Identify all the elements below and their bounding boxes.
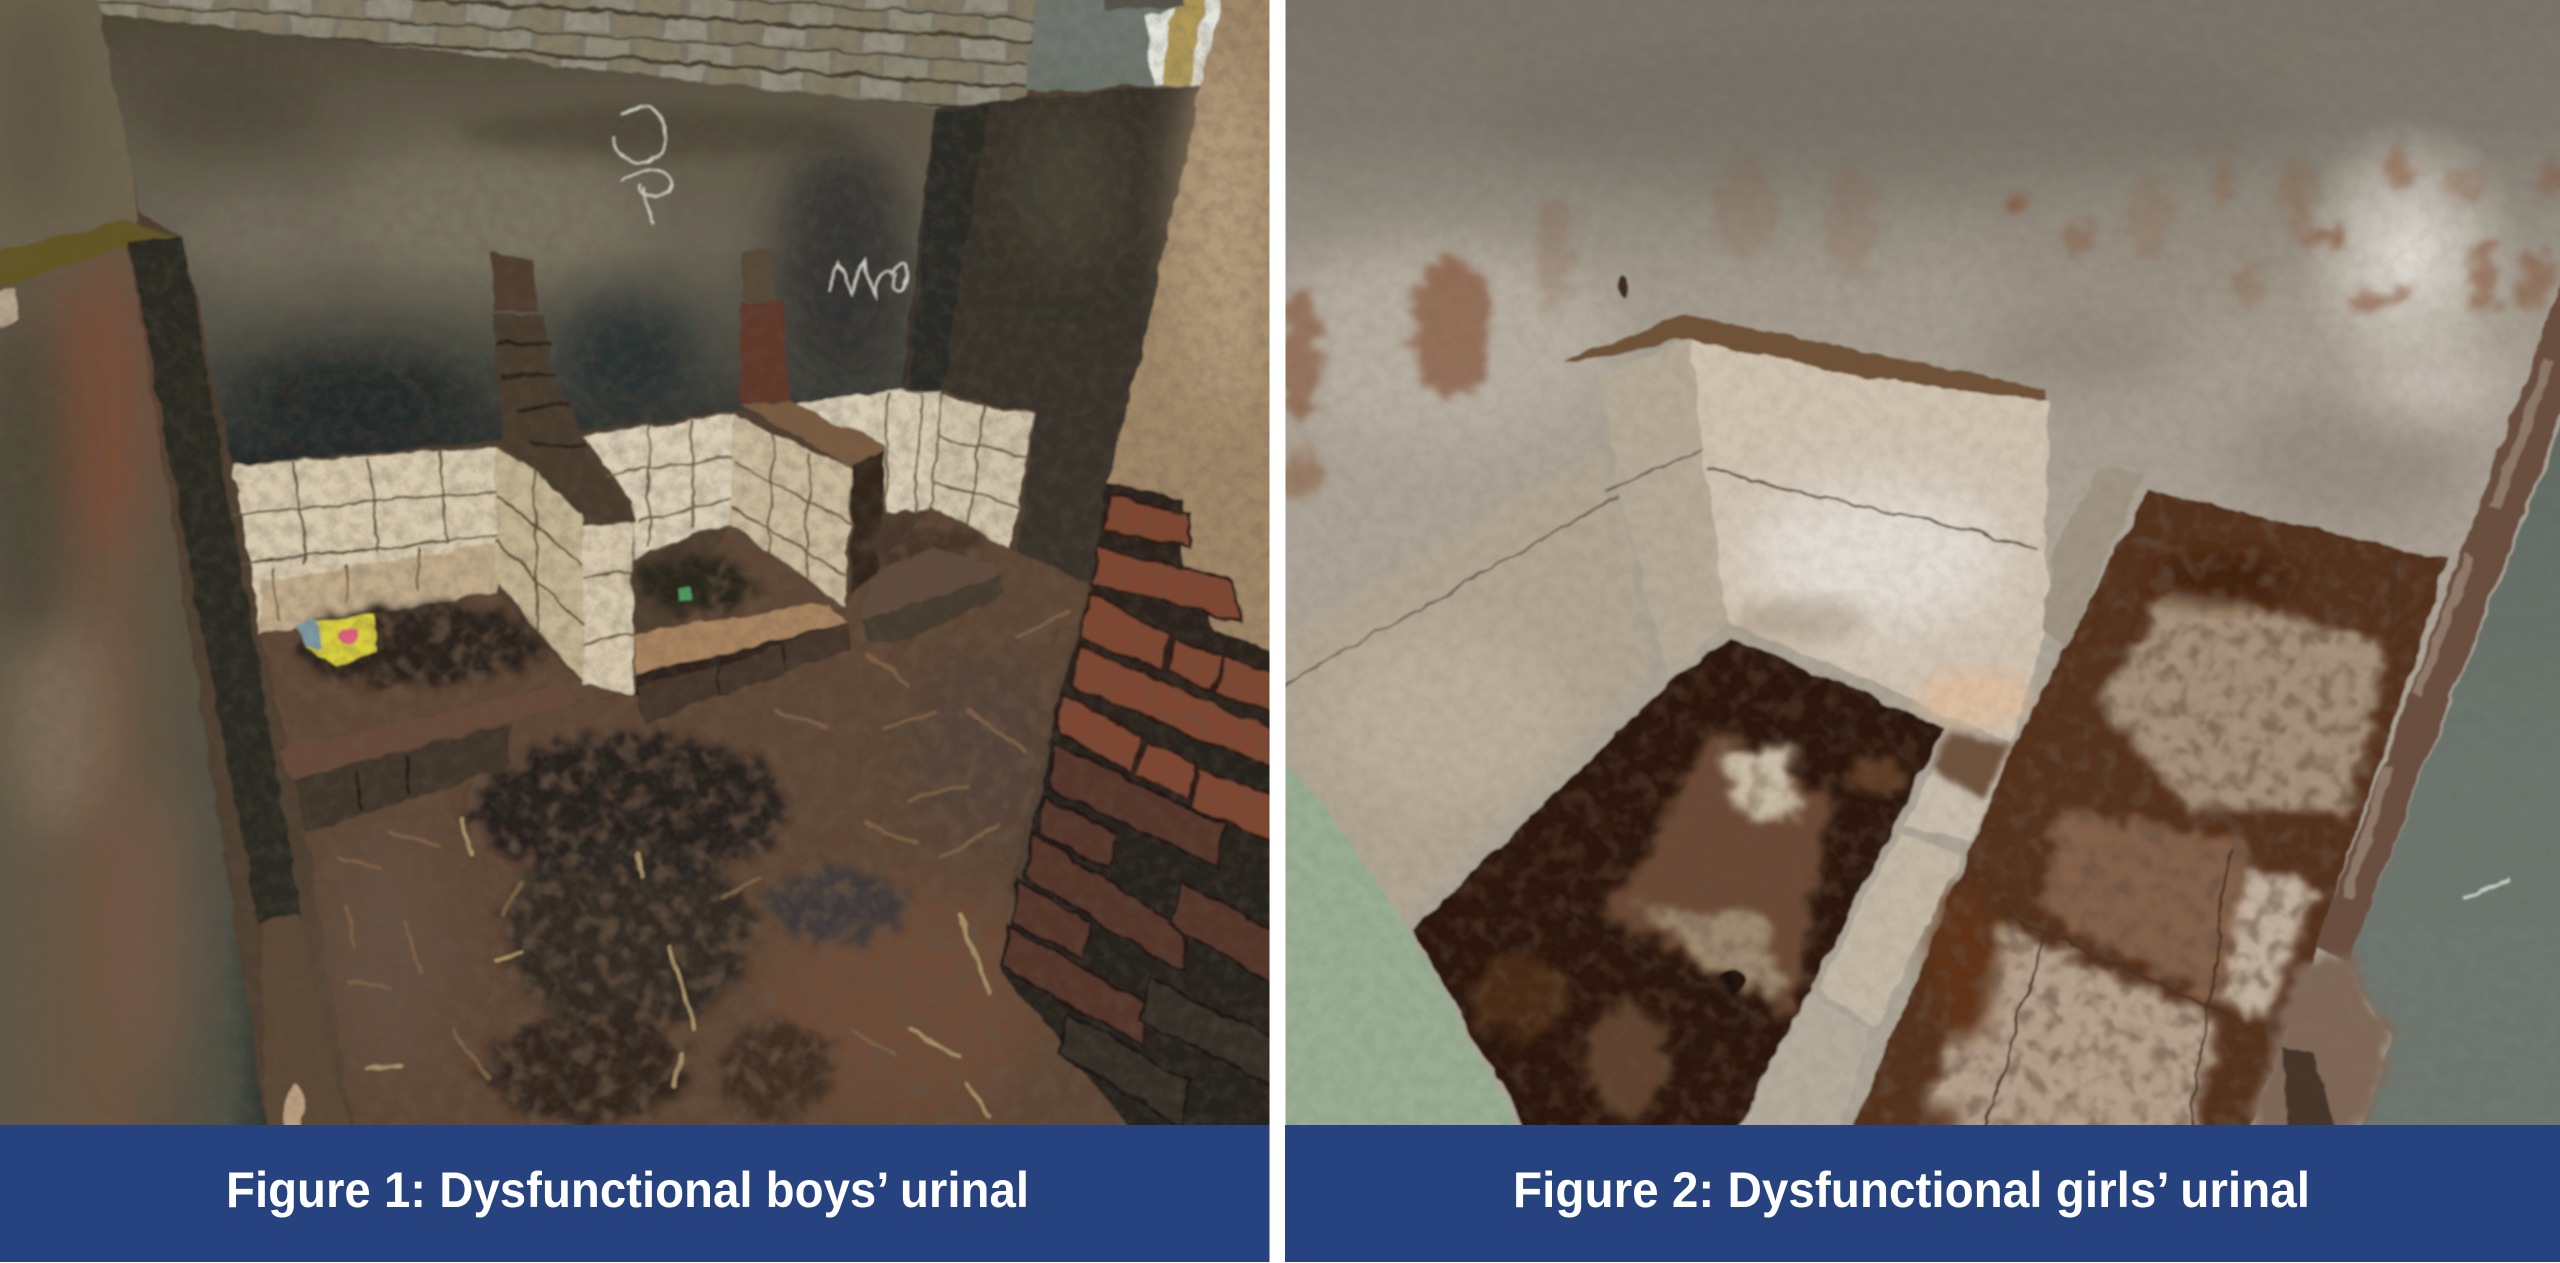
divider wall face (1689, 340, 2049, 743)
photo: dysfunctional girls' urinal (1255, 0, 2560, 1143)
panel: figure 2 girls' urinal (1255, 0, 2560, 1262)
caption text: figure 1: Figure 1: Dysfunctional boys’ urinal (226, 1162, 1029, 1218)
floor with leaf litter (240, 499, 1150, 1143)
green wall foreground (1264, 739, 1528, 1143)
left concrete wall and pillar (0, 0, 353, 1143)
upper wall shading (1255, 34, 2525, 442)
tiled urinal walls (233, 390, 1034, 703)
background building and sky (1025, 0, 1228, 92)
left cubicle stained floor (1404, 629, 1958, 1135)
right cubicle stained floor (1842, 482, 2454, 1143)
raised ledges and stones (277, 548, 1002, 833)
tiled back wall of right cubicle (1975, 303, 2560, 560)
broken brick dividers (492, 250, 885, 601)
panel: figure 1 boys' urinal (0, 0, 1290, 1262)
brick wall at top (95, 0, 1042, 114)
rusted door frame (2248, 270, 2560, 1143)
caption bar: figure 1 (0, 1125, 1270, 1262)
hand-print stains on wall (1279, 136, 2560, 499)
dark right wall (901, 84, 1201, 584)
divider top cap (1561, 314, 2045, 401)
crisp packet litter (294, 588, 691, 666)
caption text: figure 2: Figure 2: Dysfunctional girls’ urinal (1513, 1162, 2310, 1218)
stained concrete back wall (95, 13, 935, 466)
caption bar: figure 2 (1285, 1125, 2560, 1262)
grey-green door panel (2347, 364, 2560, 1143)
tiled left wall (1264, 340, 1727, 923)
photo: dysfunctional boys' urinal (0, 0, 1290, 1143)
right plaster and brick pillar (1002, 0, 1290, 1143)
tiled kerb between cubicles (1732, 468, 2144, 1143)
chalk marks on wall (616, 107, 908, 295)
